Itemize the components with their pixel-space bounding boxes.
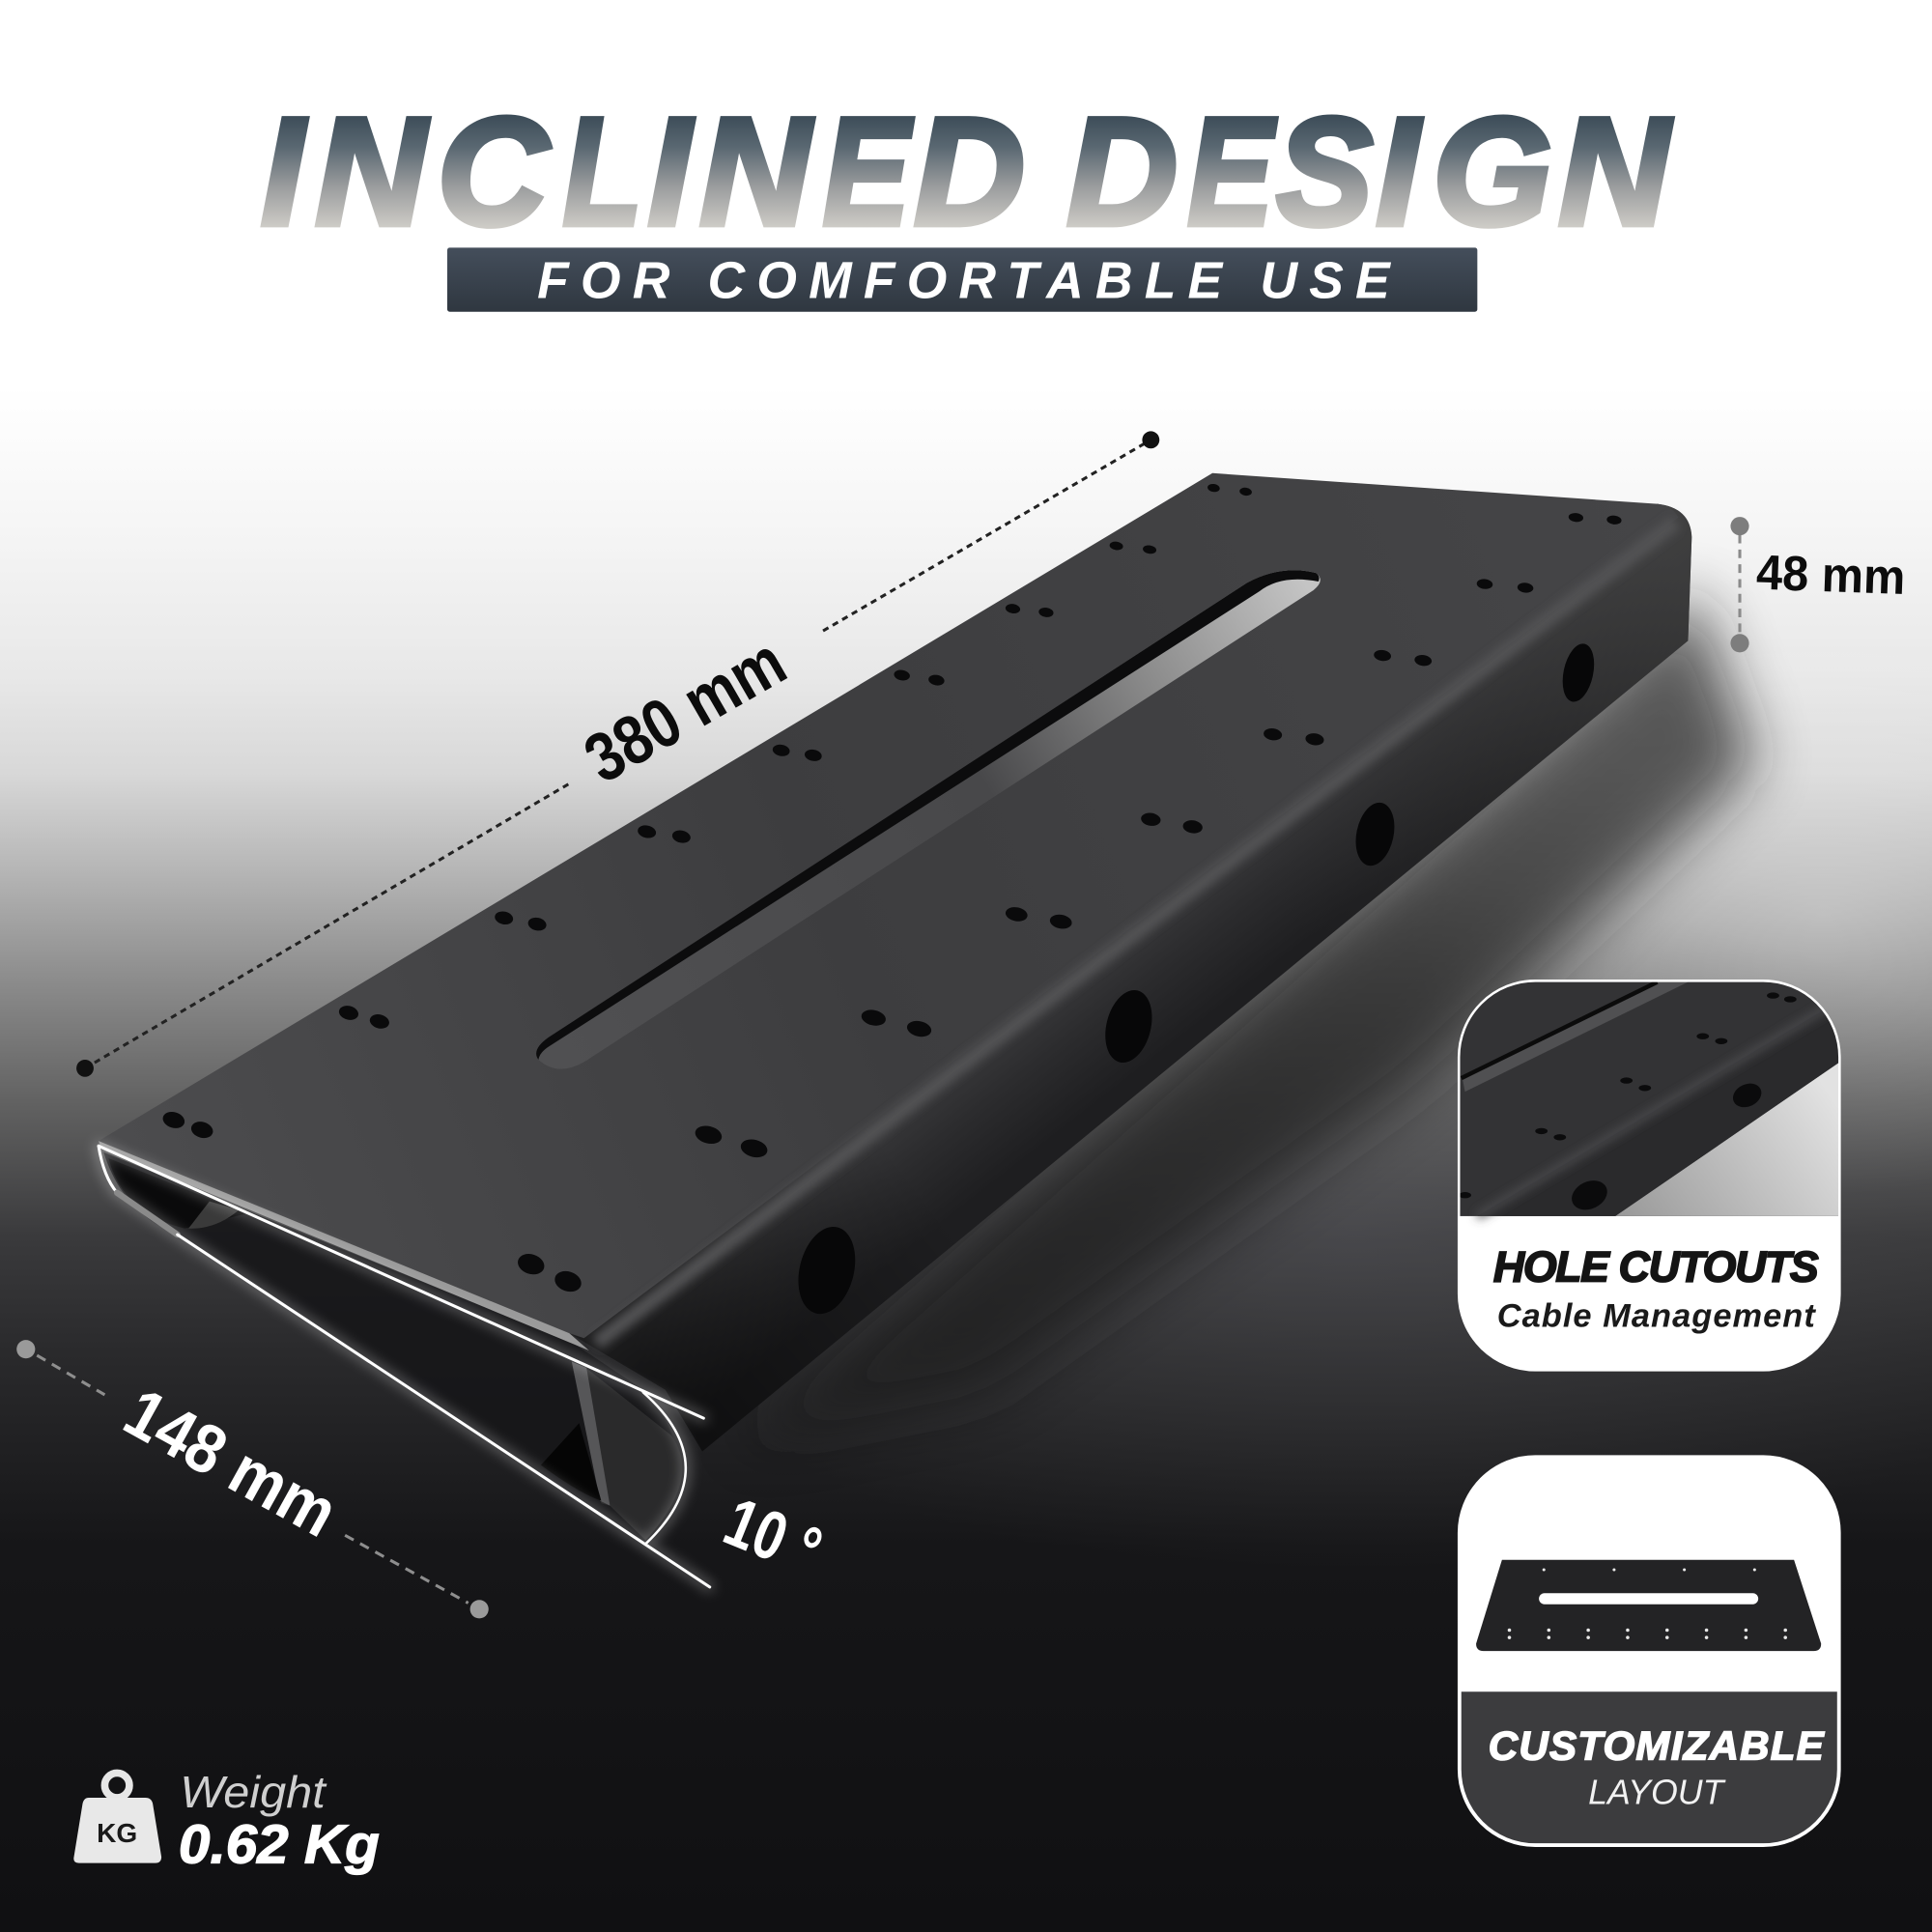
large cable holes xyxy=(790,640,1599,1320)
dimension: 380 mm xyxy=(76,431,1159,1077)
card heading: HOLE CUTOUTS xyxy=(1493,1244,1819,1292)
background light on right xyxy=(1405,629,1932,1195)
dimension: 48 mm: 48 mm xyxy=(1755,545,1906,605)
card subheading: LAYOUT xyxy=(1588,1773,1726,1811)
card: customizable layout xyxy=(1459,1457,1839,1846)
card caption band xyxy=(1462,1691,1837,1843)
dimension: 48 mm xyxy=(1730,517,1906,652)
card heading: CUSTOMIZABLE xyxy=(1489,1722,1826,1768)
title: I xyxy=(261,86,306,257)
title: L xyxy=(563,86,642,257)
dimension: 148 mm: 148 mm xyxy=(112,1374,350,1552)
top plate xyxy=(99,473,1678,1338)
title: N xyxy=(316,86,429,257)
title: E xyxy=(823,86,913,257)
weight xyxy=(73,1767,380,1875)
bend highlight xyxy=(596,523,1676,1343)
card photo xyxy=(1459,980,1839,1216)
dimension: 148 mm xyxy=(16,1340,489,1618)
title: C xyxy=(438,86,551,257)
icon: kg weight xyxy=(73,1773,161,1863)
title: N xyxy=(1559,86,1672,257)
angle guide lines xyxy=(99,1146,710,1587)
product shadow xyxy=(739,591,1756,1441)
product: inclined stand xyxy=(99,473,1691,1587)
subtitle banner: FOR COMFORTABLE USE xyxy=(537,253,1392,310)
weight: Weight xyxy=(180,1767,327,1817)
small mounting holes xyxy=(161,483,1622,1295)
dimension: 10 degrees: 10 ° xyxy=(714,1483,832,1591)
card: hole cutouts xyxy=(1459,980,1839,1370)
weight: 0.62 Kg xyxy=(179,1814,380,1875)
title: I xyxy=(1377,86,1422,257)
card subheading: Cable Management xyxy=(1497,1298,1816,1335)
background haze xyxy=(591,887,1932,1577)
rear support leg xyxy=(572,1361,682,1540)
dimension: 380 mm: 380 mm xyxy=(572,622,799,798)
underside wedge xyxy=(103,1152,678,1544)
title: S xyxy=(1276,86,1373,257)
side face xyxy=(569,504,1691,1452)
front edge xyxy=(99,1141,589,1350)
card photo xyxy=(1476,1560,1821,1651)
slot xyxy=(536,570,1321,1069)
title: I xyxy=(648,86,694,257)
title: E xyxy=(1188,86,1276,257)
icon: kg weight: KG xyxy=(97,1818,137,1848)
title: D xyxy=(1067,86,1178,257)
title: G xyxy=(1433,86,1551,257)
title: D xyxy=(914,86,1025,257)
title: N xyxy=(699,86,812,257)
